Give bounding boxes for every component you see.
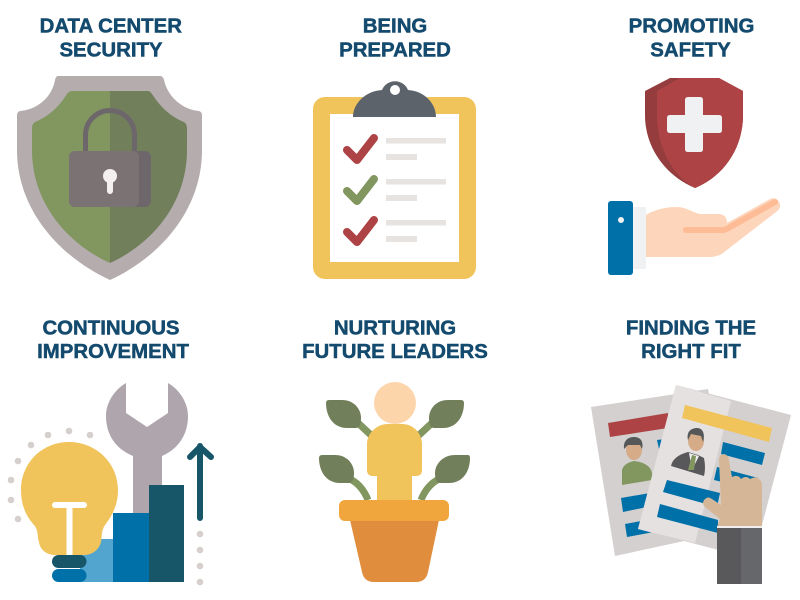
- heading: data center security: DATA CENTER: [40, 16, 182, 38]
- heading: nurturing future leaders: FUTURE LEADERS: [302, 341, 488, 363]
- icon: medical shield: [645, 78, 743, 188]
- heading: nurturing future leaders: [302, 318, 488, 363]
- icon: plant with person in pot: [319, 382, 470, 582]
- icon: open hand: [608, 198, 780, 275]
- heading: promoting safety: PROMOTING: [629, 16, 754, 38]
- icon: clipboard checklist: [313, 81, 476, 279]
- plant stems: [350, 423, 439, 500]
- bar chart: [80, 485, 184, 582]
- checklist row 3: [347, 220, 446, 242]
- suit sleeve: [717, 528, 762, 584]
- arrow: upward growth: [190, 446, 211, 518]
- heading: continuous improvement: [37, 318, 189, 363]
- icon: light bulb: [21, 442, 118, 582]
- heading: promoting safety: SAFETY: [650, 40, 731, 62]
- heading: finding the right fit: RIGHT FIT: [641, 341, 741, 363]
- icon: security shield with padlock: [17, 76, 202, 280]
- heading: being prepared: [339, 16, 451, 62]
- heading: being prepared: BEING: [363, 16, 427, 38]
- dots below arrow: [197, 531, 203, 585]
- back resume: [591, 389, 735, 556]
- heading: finding the right fit: FINDING THE: [626, 318, 756, 340]
- heading: data center security: [40, 16, 182, 62]
- dots around light bulb: [8, 428, 93, 522]
- icon: resumes and pointing hand: [591, 385, 791, 584]
- shirt cuff: [717, 526, 762, 528]
- heading: continuous improvement: CONTINUOUS: [42, 318, 180, 340]
- pointing hand: [703, 454, 762, 527]
- heading: finding the right fit: [626, 318, 756, 363]
- heading: promoting safety: [629, 16, 754, 62]
- heading: nurturing future leaders: NURTURING: [334, 318, 456, 340]
- checklist row 2: [347, 179, 446, 201]
- heading: continuous improvement: IMPROVEMENT: [37, 341, 189, 363]
- icon: wrench: [106, 383, 188, 520]
- heading: being prepared: PREPARED: [339, 40, 451, 62]
- checklist row 1: [347, 138, 446, 160]
- plant leaves: [319, 400, 470, 483]
- front resume: [638, 385, 791, 559]
- heading: data center security: SECURITY: [59, 40, 163, 62]
